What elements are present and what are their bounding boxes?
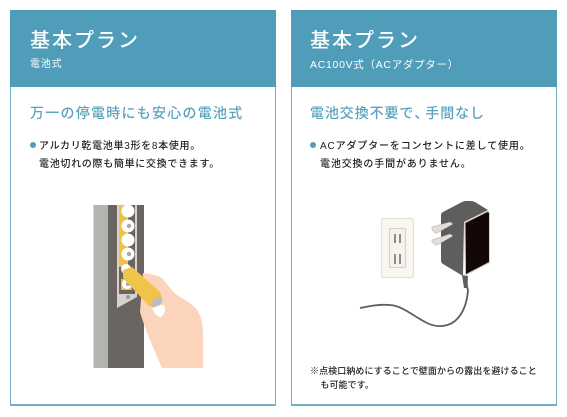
panel: AC adapter plan bbox=[291, 10, 557, 406]
bullet text bbox=[39, 140, 220, 170]
bullet text bbox=[320, 140, 531, 170]
panel: battery plan bbox=[10, 10, 276, 406]
bullet dot bbox=[30, 142, 36, 148]
title: 基本プラン bbox=[30, 30, 140, 52]
subtitle: AC100V式（ACアダプター） bbox=[310, 59, 459, 71]
footnote: も可能です。 bbox=[320, 380, 374, 390]
bullet text: 電池交換の手間がありません。 bbox=[320, 159, 472, 170]
bullet text: ACアダプターをコンセントに差して使用。 bbox=[320, 141, 531, 152]
heading: 電池交換不要で、手間なし bbox=[310, 105, 485, 121]
title: 基本プラン bbox=[310, 30, 420, 52]
header: AC plan bbox=[291, 10, 557, 87]
subtitle: 電池式 bbox=[30, 59, 62, 70]
bullet dot bbox=[310, 142, 316, 148]
header: battery plan bbox=[10, 10, 276, 87]
bullet text: 電池切れの際も簡単に交換できます。 bbox=[39, 159, 220, 170]
footnote bbox=[310, 366, 537, 390]
heading: 万一の停電時にも安心の電池式 bbox=[30, 105, 244, 121]
footnote: ※点検口納めにすることで壁面からの露出を避けること bbox=[310, 366, 537, 376]
bullet text: アルカリ乾電池単3形を8本使用。 bbox=[39, 141, 201, 152]
